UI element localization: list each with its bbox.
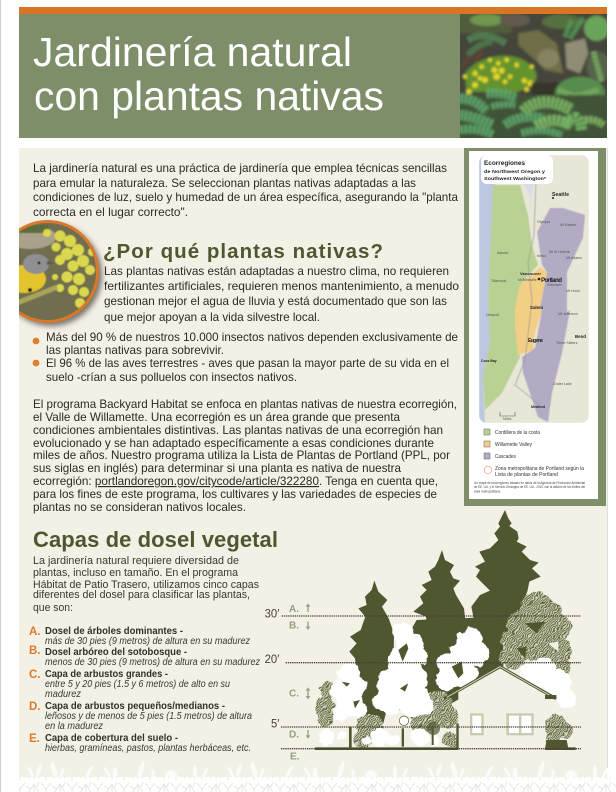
paragraph: canopy layers intro	[33, 555, 260, 614]
list: five canopy layers	[29, 626, 260, 754]
map place labels: Olympia	[537, 220, 550, 224]
paragraph: Backyard Habitat program: evolucionado y se han adaptado específicamente a esas condiciones durante	[33, 437, 434, 450]
paragraph: Backyard Habitat program: miles de años. Nuestro programa utiliza la Lista de Plantas de Portland (PPL, por	[33, 449, 450, 462]
map legend: Cordillera de la costa	[495, 430, 541, 436]
map place labels: Bend	[575, 334, 586, 339]
paragraph: canopy layers intro: La jardinería natural requiere diversidad de	[33, 555, 239, 567]
layer markers: B.	[289, 620, 299, 631]
map source note: Un mapa de ecorregiones basado en datos de la Agencia de Protección Ambiental	[474, 481, 585, 485]
paragraph: why native plants	[104, 265, 459, 324]
map title box: Southwest Washington*	[484, 176, 546, 181]
cream content panel	[0, 148, 607, 778]
layer markers: C.	[289, 689, 299, 700]
list: five canopy layers: A.	[29, 626, 40, 638]
height labels: 20′	[265, 652, 280, 666]
hatched shrubs	[315, 592, 573, 748]
paragraph: why native plants: que mejor apoyan a la vida silvestre local.	[104, 311, 320, 324]
map place labels: Salem	[530, 305, 543, 310]
map place labels: Mt Adams	[566, 256, 582, 260]
title	[33, 29, 384, 119]
bullet list: El 96 % de las aves terrestres - aves que pasan la mayor parte de su vida en el	[46, 357, 449, 370]
list: five canopy layers: leñosos y de menos de 5 pies (1.5 metros) de altura	[45, 711, 252, 722]
bullet list: las plantas nativas para sobrevivir.	[46, 344, 224, 357]
paragraph: why native plants: Las plantas nativas están adaptadas a nuestro clima, no requieren	[104, 265, 449, 278]
paragraph: canopy layers intro: diferentes del dosel para clasificar las plantas,	[33, 589, 250, 601]
height lines	[281, 616, 581, 749]
map legend	[484, 429, 585, 478]
heading: canopy layers: Capas de dosel vegetal	[33, 527, 278, 552]
photo: bird on blossoms	[19, 220, 106, 330]
map legend: Willamette Valley	[495, 442, 532, 448]
map place labels: McMinnville	[518, 278, 537, 282]
map place labels: Crater Lake	[553, 382, 572, 386]
house	[444, 667, 556, 749]
height labels: 30′	[265, 607, 280, 621]
map place labels: Astoria	[497, 251, 508, 255]
map title box: Ecorregiones	[484, 160, 525, 167]
intro paragraph: condiciones de luz, suelo y humedad de un área específica, asegurando la "planta	[33, 191, 459, 204]
bullet list: suelo -crían a sus polluelos con insectos nativos.	[46, 371, 297, 384]
title: con plantas nativas	[34, 73, 384, 119]
map legend: Lista de plantas de Portland	[495, 472, 558, 478]
layer markers: A.	[289, 604, 299, 615]
paragraph: Backyard Habitat program	[33, 398, 457, 514]
map title box: de Northwest Oregon y	[484, 169, 546, 174]
list: five canopy layers: Dosel arbóreo del sotobosque -	[45, 647, 187, 658]
map source note: área metropolitana.	[474, 490, 501, 494]
paragraph: Backyard Habitat program: el Valle de Willamette. Una ecorregión es un área grande que presenta	[33, 411, 401, 424]
layer markers: D.	[289, 729, 299, 740]
map place labels: Coos Bay	[481, 359, 497, 363]
map source note: de EE. UU. y el Servicio Geológico de EE. UU., 2010, con la adición de los límites del	[474, 485, 585, 489]
map place labels: Seattle	[552, 192, 569, 198]
map place labels: Eugene	[528, 338, 543, 344]
height labels: 5′	[271, 716, 280, 730]
ground	[315, 747, 576, 750]
paragraph: Backyard Habitat program: ecorregión: portlandoregon.gov/citycode/article/322280. Tenga en cuenta que,	[33, 475, 438, 488]
paragraph: Backyard Habitat program: El programa Backyard Habitat se enfoca en plantas nativas de nuestra ecorregión,	[33, 398, 457, 411]
map place labels: Gresham	[547, 283, 562, 287]
header banner	[19, 7, 615, 143]
intro paragraph: correcta en el lugar correcto".	[33, 206, 188, 219]
intro paragraph: para emular la naturaleza. Se seleccionan plantas nativas adaptadas a las	[33, 177, 416, 190]
map place labels: Vancouver	[520, 271, 541, 276]
paragraph: Backyard Habitat program: condiciones ambientales distintivas. Las plantas nativas de una ecorregión han	[33, 424, 443, 437]
panel: ecoregions map	[464, 148, 606, 506]
conifer trees	[349, 510, 541, 723]
layer markers: E.	[290, 751, 300, 762]
map	[479, 155, 589, 423]
map place labels: Mt Jefferson	[558, 312, 578, 316]
paragraph: Backyard Habitat program: para los fines de este programa, los cultivares y las variedades de especies de	[33, 488, 437, 501]
map place labels	[481, 192, 586, 421]
map source note	[474, 481, 585, 494]
paragraph: Backyard Habitat program: plantas no se consideran nativos locales.	[33, 501, 246, 514]
list: five canopy layers: hierbas, gramíneas, pastos, plantas herbáceas, etc.	[45, 743, 251, 754]
layer markers	[289, 604, 300, 762]
list: five canopy layers: Capa de arbustos grandes -	[45, 669, 168, 680]
map place labels: Three Sisters	[556, 341, 578, 345]
illustration: canopy layers with trees and house	[265, 510, 581, 762]
white deciduous trees	[319, 623, 576, 747]
paragraph: canopy layers intro: que son:	[33, 602, 73, 614]
map place labels: Tillamook	[491, 279, 506, 283]
list: five canopy layers: Dosel de árboles dominantes -	[45, 626, 183, 637]
map place labels: Medford	[531, 405, 545, 409]
map place labels: Kelso	[537, 254, 546, 258]
paragraph: Backyard Habitat program: sus siglas en inglés) para determinar si una planta es nativa de nuestra	[33, 462, 402, 475]
list: five canopy layers: C.	[29, 669, 40, 681]
list: five canopy layers: menos de 30 pies (9 metros) de altura en su madurez	[45, 657, 260, 668]
map place labels: Mt Hood	[566, 289, 580, 293]
map legend: Zona metropolitana de Portland según la	[495, 466, 585, 472]
paragraph: canopy layers intro: plantas, incluso en tamaño. En el programa	[33, 567, 238, 579]
map legend: Cascades	[495, 454, 516, 460]
bullet list	[33, 331, 458, 384]
height labels	[265, 607, 280, 730]
list: five canopy layers: Capa de arbustos pequeños/medianos -	[45, 701, 225, 712]
list: five canopy layers: en la madurez	[45, 721, 103, 732]
list: five canopy layers: madurez	[45, 689, 81, 700]
heading: why native plants: ¿Por qué plantas nativas?	[103, 240, 383, 263]
list: five canopy layers: D.	[29, 701, 40, 713]
map place labels: Mt Rainier	[560, 223, 577, 227]
bullet list: Más del 90 % de nuestros 10.000 insectos nativos dependen exclusivamente de	[46, 331, 458, 344]
list: five canopy layers: Capa de cobertura del suelo -	[45, 733, 178, 744]
paragraph: canopy layers intro: Hábitat de Patio Trasero, utilizamos cinco capas	[33, 579, 260, 591]
dark gaps in foliage	[342, 622, 568, 749]
map title box	[481, 155, 553, 184]
map place labels: Miles	[503, 417, 512, 421]
paragraph: why native plants: fertilizantes artificiales, requieren menos mantenimiento, a menudo	[104, 280, 459, 293]
layer arrows	[306, 603, 310, 739]
paragraph: why native plants: gestionan mejor el agua de lluvia y está documentado que son las	[104, 295, 447, 308]
list: five canopy layers: entre 5 y 20 pies (1.5 y 6 metros) de alto en su	[45, 679, 230, 690]
footer foliage band	[19, 758, 616, 792]
list: five canopy layers: B.	[29, 645, 40, 657]
intro paragraph: La jardinería natural es una práctica de jardinería que emplea técnicas sencillas	[33, 162, 447, 175]
title: Jardinería natural	[33, 29, 352, 75]
map place labels: Portland	[541, 277, 562, 284]
intro paragraph	[33, 162, 459, 219]
list: five canopy layers: más de 30 pies (9 metros) de altura en su madurez	[45, 636, 250, 647]
map place labels: Mt St Helens	[549, 250, 570, 254]
photo: ferns and yellow flowers	[460, 14, 607, 138]
map place labels: Newport	[486, 313, 499, 317]
list: five canopy layers: E.	[29, 733, 40, 745]
